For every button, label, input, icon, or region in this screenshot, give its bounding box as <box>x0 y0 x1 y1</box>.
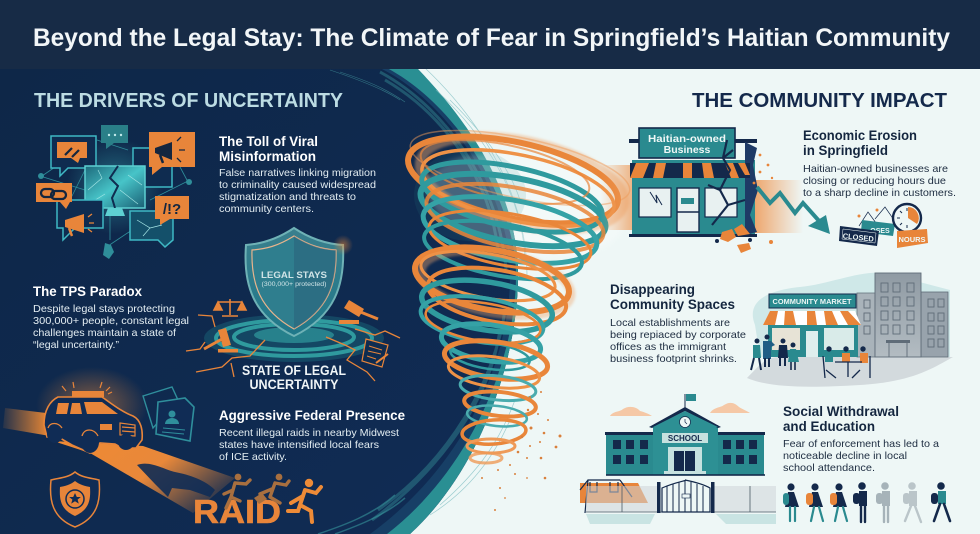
text block: tps paradox: Despite legal stays protecting <box>33 303 175 315</box>
icon: scales of justice <box>214 299 246 316</box>
header bar <box>0 0 980 69</box>
crescent divider band <box>318 68 527 534</box>
label: state of legal uncertainty <box>242 363 346 392</box>
text block: economic erosion <box>803 128 956 199</box>
icon: closed and reduced hours signs: OSES <box>870 228 890 235</box>
icon: closed and reduced hours signs: CLOSED <box>842 231 875 244</box>
text block: disappearing spaces: Disappearing <box>610 282 695 297</box>
icon: running figures <box>224 474 321 522</box>
text block: tps paradox: The TPS Paradox <box>33 284 142 299</box>
text block: viral misinformation <box>219 134 376 215</box>
icon: community members <box>751 334 870 378</box>
text block: viral misinformation: community centers. <box>219 203 314 215</box>
text block: economic erosion: in Springfield <box>803 143 888 158</box>
tornado <box>400 115 636 463</box>
text block: tps paradox <box>33 284 189 351</box>
icon: community market and offices: COMMUNITY MARKET <box>772 297 852 306</box>
text block: disappearing spaces: business footprint shrinks. <box>610 353 737 365</box>
icon: documents <box>143 387 194 441</box>
label: state of legal uncertainty: STATE OF LEGAL <box>242 363 346 378</box>
icon: cracked storefront: Business <box>664 144 711 156</box>
text block: federal presence <box>219 408 405 463</box>
text block: disappearing spaces: Community Spaces <box>610 297 735 312</box>
text block: social withdrawal: noticeable decline in local <box>783 450 907 462</box>
label: state of legal uncertainty: UNCERTAINTY <box>250 377 338 392</box>
heading: the drivers of uncertainty: THE DRIVERS OF UNCERTAINTY <box>34 90 344 112</box>
text block: tps paradox: 300,000+ people, constant legal <box>33 315 189 327</box>
icon: school with gate <box>580 394 776 524</box>
text block: viral misinformation: The Toll of Viral <box>219 134 318 149</box>
text block: viral misinformation: Misinformation <box>219 149 316 164</box>
text block: viral misinformation: stigmatization and threats to <box>219 191 356 203</box>
spotlight beam <box>3 367 235 513</box>
text block: viral misinformation: False narratives linking migration <box>219 167 376 179</box>
text block: disappearing spaces <box>610 282 746 365</box>
text block: tps paradox: “legal uncertainty.” <box>33 339 119 351</box>
text block: social withdrawal: Fear of enforcement has led to a <box>783 438 939 450</box>
text block: social withdrawal: school attendance. <box>783 462 875 474</box>
icon: closed and reduced hours signs: NOURS <box>898 235 926 244</box>
icon: legal stays shield with vortex: (300,000+ protected) <box>262 282 326 288</box>
icon: cracked storefront: Haitian-owned <box>648 133 726 145</box>
icon: declining arrow <box>757 187 830 234</box>
icon: cracked storefront <box>600 128 803 253</box>
icon: police badge <box>50 472 100 527</box>
icon: legal document <box>362 339 388 367</box>
cracks around uncertainty <box>186 315 400 381</box>
text block: federal presence: Aggressive Federal Presence <box>219 408 405 423</box>
raid label: RAID <box>193 493 281 530</box>
text block: economic erosion: Economic Erosion <box>803 128 917 143</box>
icon: legal stays shield with vortex: LEGAL STAYS <box>261 270 327 281</box>
text block: federal presence: of ICE activity. <box>219 451 287 463</box>
text block: disappearing spaces: offices as the immigrant <box>610 341 726 353</box>
icon: gavel left <box>204 328 238 352</box>
text block: federal presence: Recent illegal raids in nearby Midwest <box>219 427 399 439</box>
text block: economic erosion: closing or reducing hours due <box>803 175 946 187</box>
text block: social withdrawal: and Education <box>783 419 875 434</box>
icon: misinformation network <box>36 125 195 259</box>
text block: disappearing spaces: being repiaced by corporate <box>610 329 746 341</box>
icon: misinformation network: /!? <box>163 201 181 218</box>
icon: closed and reduced hours signs <box>839 204 928 248</box>
icon: school with gate: SCHOOL <box>668 434 702 443</box>
icon: community market and offices <box>747 273 953 387</box>
text block: economic erosion: to a sharp decline in customers. <box>803 187 956 199</box>
text block: social withdrawal <box>783 404 939 474</box>
icon: row of students fading <box>783 482 950 522</box>
panel: dark drivers background <box>0 68 518 534</box>
text block: disappearing spaces: Local establishments are <box>610 317 730 329</box>
icon: patrol car <box>44 382 142 453</box>
icon: legal stays shield with vortex <box>204 228 384 362</box>
debris particles <box>481 391 562 511</box>
text block: tps paradox: challenges maintain a state of <box>33 327 176 339</box>
text block: social withdrawal: Social Withdrawal <box>783 404 899 419</box>
icon: gavel right <box>339 300 378 324</box>
text block: economic erosion: Haitian-owned businesses are <box>803 163 948 175</box>
text block: viral misinformation: to criminality caused widespread <box>219 179 376 191</box>
text block: federal presence: states have intensified local fears <box>219 439 379 451</box>
title: Beyond the Legal Stay: The Climate of Fear in Springfield’s Haitian Community <box>33 24 950 52</box>
heading: the community impact: THE COMMUNITY IMPACT <box>692 90 947 112</box>
